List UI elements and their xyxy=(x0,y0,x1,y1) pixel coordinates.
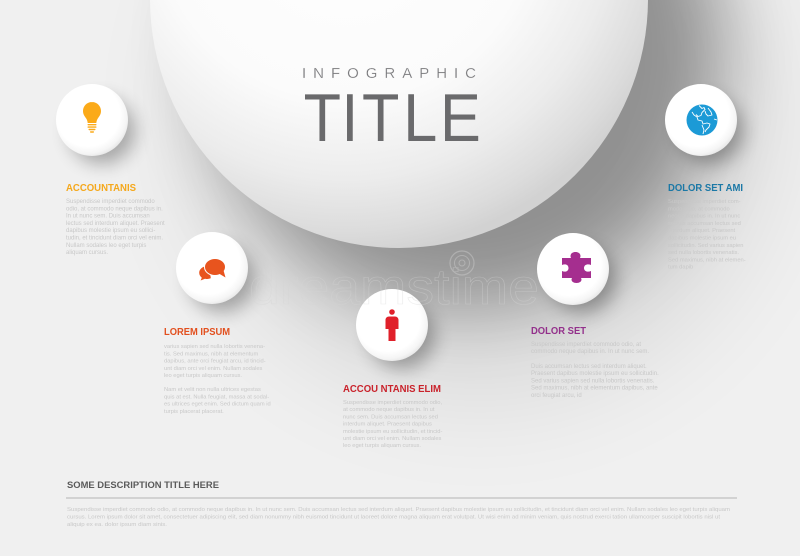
heading 2: LOREM IPSUM xyxy=(164,327,230,338)
sphere 2 xyxy=(176,232,255,312)
node 1: accountanis xyxy=(56,84,165,256)
body 3: at commodo neque dapibus in. In ut xyxy=(343,407,435,413)
body 5: Suspendisse imperdiet com- xyxy=(668,199,741,205)
body 4: Sed varius sapien sed nulla lobortis venenatis. xyxy=(531,378,655,384)
sphere 4 xyxy=(537,233,616,313)
body 4: commodo neque dapibus in. In ut nunc sem. xyxy=(531,349,649,355)
body 1: Suspendisse imperdiet commodo xyxy=(66,199,155,205)
icon: puzzle piece xyxy=(562,252,591,283)
body 1: Nullam sodales leo eget turpis xyxy=(66,243,146,249)
body 5: sollicitudin. Sed varius sapien xyxy=(668,243,743,249)
node 4: dolor set xyxy=(531,233,659,399)
body 1: lectus sed interdum aliquet. Praesent xyxy=(66,221,165,227)
body 3 xyxy=(343,400,442,449)
body 1: dapibus molestie ipsum eu sollici- xyxy=(66,228,155,234)
body 2: es ultrices eget enim. Sed dictum quam id xyxy=(164,402,271,408)
body 4: Praesent dapibus molestie ipsum eu sollicitudin. xyxy=(531,371,659,377)
description title: SOME DESCRIPTION TITLE HERE xyxy=(67,480,219,490)
body 4: Sed maximus, nibh at elementum dapibus, ante xyxy=(531,386,658,392)
body 5: modo odio, at commodo xyxy=(668,206,730,212)
node 3: accou ntanis elim xyxy=(343,289,442,449)
body 4: orci feugiat arcu, id xyxy=(531,393,582,399)
heading 3: ACCOU NTANIS ELIM xyxy=(343,384,441,395)
icon: globe xyxy=(686,104,718,136)
body 2: varius sapien sed nulla lobortis venena- xyxy=(164,344,265,350)
body 2: tis. Sed maximus, nibh at elementum xyxy=(164,351,258,357)
sphere 3 xyxy=(356,289,435,369)
body 2: Nam et velit non nulla ultrices egestas xyxy=(164,387,261,393)
heading 5: DOLOR SET AMI xyxy=(668,183,743,194)
description text: cursus. Lorem ipsum dolor sit amet, consectetuer adipiscing elit, sed diam nonummy nibh euismod tincidunt ut laoreet dolore magna aliquam erat volutpat. Ut wisi enim ad minim veniam, quis nostrud exerci tation ullamcorper suscipit lobortis nisl ut xyxy=(67,514,720,520)
big sphere shadow xyxy=(190,0,770,400)
watermark: dreamstime xyxy=(249,259,539,315)
body 5: interdum aliquet. Praesent xyxy=(668,228,736,234)
main title: TITLE xyxy=(304,79,481,156)
description text: Suspendisse imperdiet commodo odio, at commodo neque dapibus in. In ut nunc sem. Duis accumsan lectus sed interdum aliquet. Praesent dapibus molestie ipsum eu sollicitudin, et tincidunt diam orci vel enim. Nullam sodales leo eget turpis aliquam xyxy=(67,507,730,513)
body 2: unt diam orci vel enim. Nullam sodales xyxy=(164,366,263,372)
sphere 5 xyxy=(665,84,744,164)
body 5: seDuis accumsan lectus sed xyxy=(668,221,741,227)
body 2 xyxy=(164,344,271,415)
body 4: Duis accumsan lectus sed interdum aliquet. xyxy=(531,364,647,370)
body 5: sed nulla lobortis venenatis. xyxy=(668,250,739,256)
node 5: dolor set ami xyxy=(665,84,746,271)
body 2: leo eget turpis aliquam cursus. xyxy=(164,373,242,379)
body 2: dapibus, ante orci feugiat arcu, id tincid- xyxy=(164,359,266,365)
body 2: quis at est. Nulla feugiat, massa at sodal- xyxy=(164,394,269,400)
body 1: odio, at commodo neque dapibus in. xyxy=(66,206,163,212)
node 2: lorem ipsum xyxy=(164,232,271,415)
body 4 xyxy=(531,342,659,399)
icon: light bulb xyxy=(83,102,101,133)
icon: speech bubbles xyxy=(199,258,226,280)
title eyebrow: INFOGRAPHIC xyxy=(302,65,476,82)
big central sphere xyxy=(150,0,648,248)
body 2: turpis placerat placerat. xyxy=(164,409,224,415)
body 1: aliquam cursus. xyxy=(66,250,108,256)
body 3: Suspendisse imperdiet commodo odio, xyxy=(343,400,442,406)
sphere 1 xyxy=(56,84,135,164)
body 4: Suspendisse imperdiet commodo odio, at xyxy=(531,342,641,348)
body 1: tudin, et tincidunt diam orci vel enim. xyxy=(66,236,163,242)
title block xyxy=(302,65,481,156)
description text xyxy=(67,507,730,528)
heading 1: ACCOUNTANIS xyxy=(66,183,136,194)
body 3: leo eget turpis aliquam cursus. xyxy=(343,443,421,449)
body 3: nunc sem. Duis accumsan lectus sed xyxy=(343,414,438,420)
body 3: molestie ipsum eu sollicitudin, et tincid- xyxy=(343,429,442,435)
body 5: neque dapibus in. In ut nunc xyxy=(668,214,740,220)
body 1: In ut nunc sem. Duis accumsan xyxy=(66,214,150,220)
heading 4: DOLOR SET xyxy=(531,326,586,337)
body 5: tum dapib xyxy=(668,265,693,271)
body 5: dapibus molestie ipsum eu xyxy=(668,236,736,242)
body 5: Sed maximus, nibh at elemen- xyxy=(668,257,746,263)
description section xyxy=(66,480,737,528)
body 1 xyxy=(66,199,165,256)
body 3: interdum aliquet. Praesent dapibus xyxy=(343,422,432,428)
body 5 xyxy=(668,199,746,271)
icon: person xyxy=(386,309,398,341)
description text: aliquip ex ea. dolor ipsum diam sinis. xyxy=(67,522,167,528)
body 3: unt diam orci vel enim. Nullam sodales xyxy=(343,436,442,442)
